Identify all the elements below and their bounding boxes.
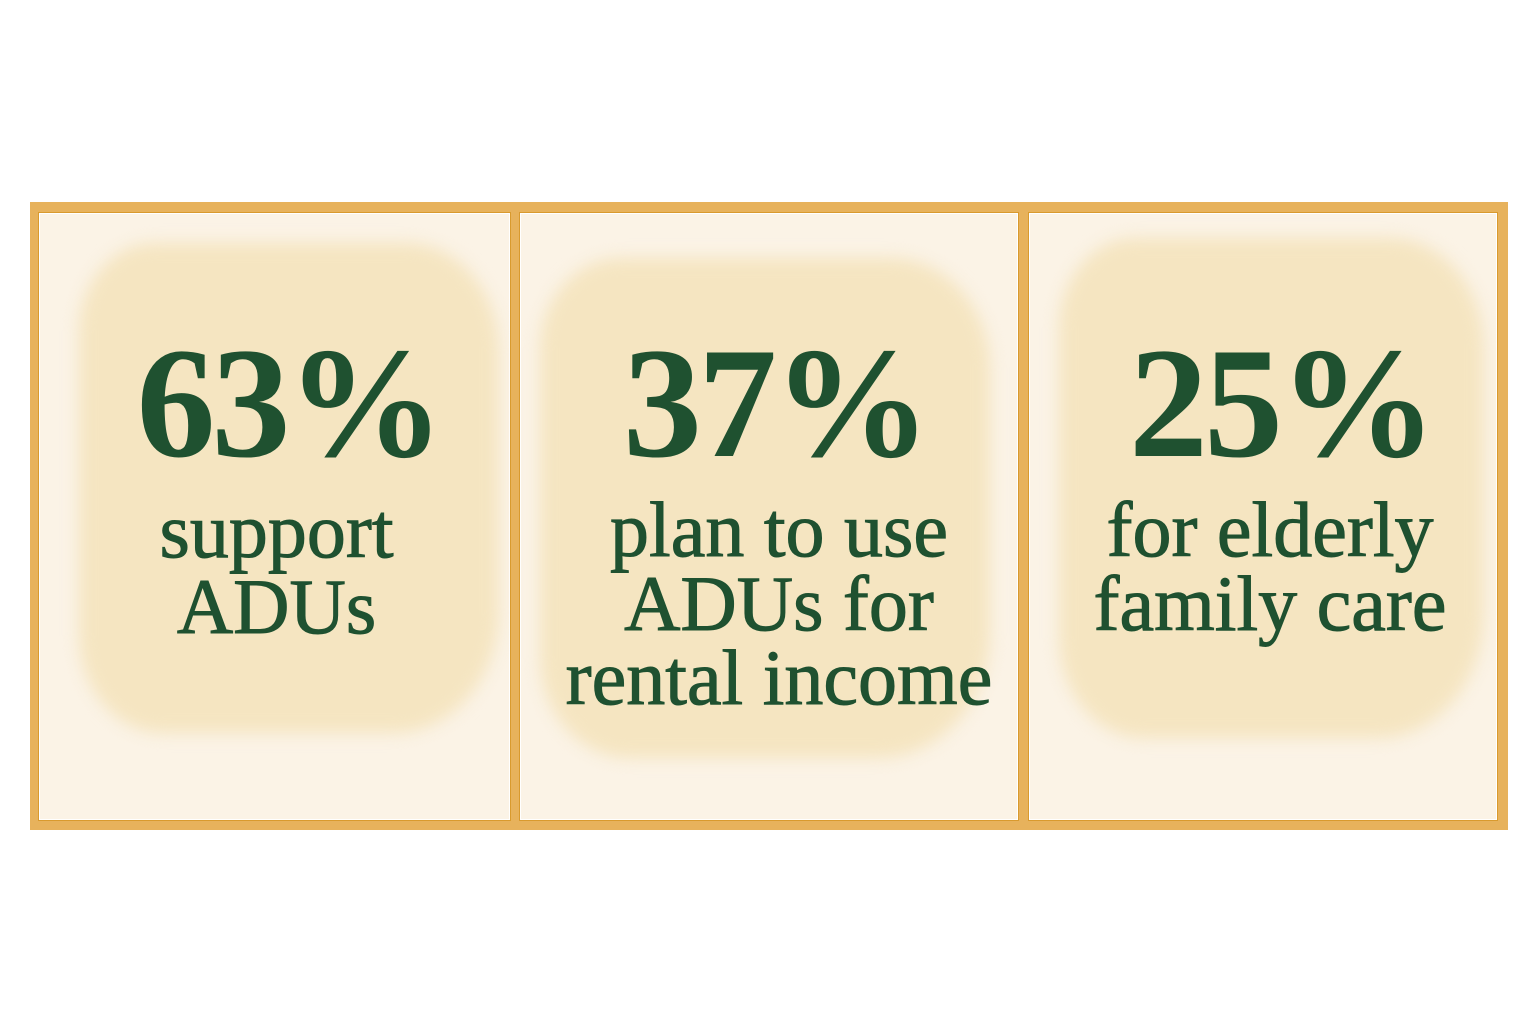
stat number 37%: 37% bbox=[623, 316, 927, 491]
label: for elderly family care: for elderly bbox=[1106, 486, 1434, 573]
label: for elderly family care bbox=[1094, 486, 1446, 647]
label: support ADUs: support bbox=[160, 487, 394, 574]
panel: 25% elderly family care bbox=[1029, 213, 1497, 820]
label: plan to use ADUs for rental income: rental income bbox=[566, 634, 992, 721]
label: support ADUs: ADUs bbox=[177, 563, 376, 650]
label: plan to use ADUs for rental income: plan to use bbox=[610, 486, 948, 573]
stat number 25%: 25% bbox=[1129, 316, 1433, 491]
label: plan to use ADUs for rental income: ADUs for bbox=[624, 560, 934, 647]
label: support ADUs bbox=[160, 487, 394, 650]
frame bbox=[30, 202, 1508, 830]
label: for elderly family care: family care bbox=[1094, 560, 1446, 647]
label: plan to use ADUs for rental income bbox=[566, 486, 992, 721]
stat number 63%: 63% bbox=[136, 316, 440, 491]
panel: 63% support ADUs bbox=[39, 213, 510, 820]
panel: 37% rental income bbox=[520, 213, 1018, 820]
